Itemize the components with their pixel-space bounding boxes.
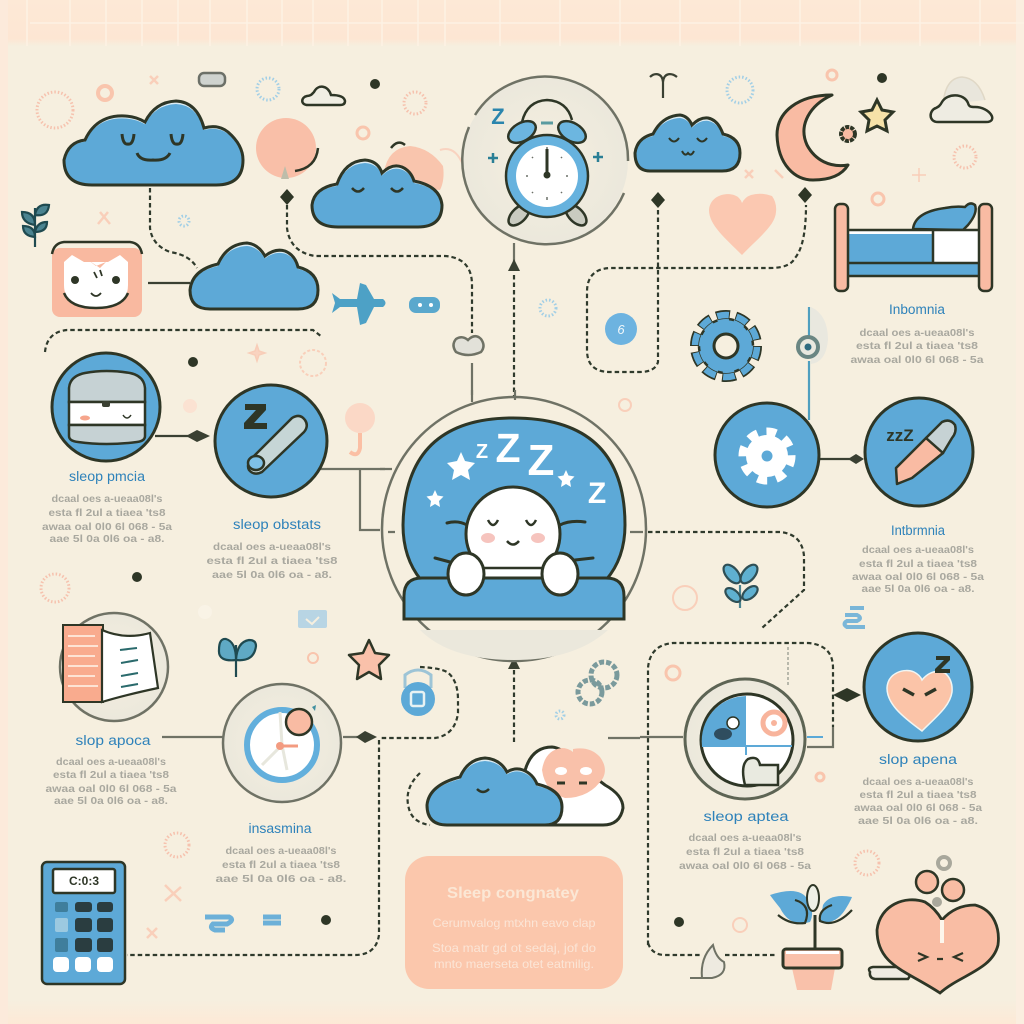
icon: aries glyph: [650, 74, 677, 98]
text: sleep apnea left: awaa oal 0l0 6l 068 - 5a: [42, 522, 173, 533]
icon: sleep mask circle: [52, 353, 160, 461]
text: sleep apnea right: awaa oal 0l0 6l 068 - 5a: [854, 803, 983, 814]
text: insomnia right: aae 5l 0a 0l6 oa - a8.: [862, 584, 975, 595]
text: sleep apnea centre right: awaa oal 0l0 6l 068 - 5a: [679, 861, 812, 872]
text: insomnia lower: [216, 821, 347, 885]
text: insomnia right: dcaal oes a-ueaa08l's: [862, 545, 974, 556]
icon: sleeping heart: [869, 857, 998, 993]
icon: outline cloud with halo: [931, 77, 992, 122]
text: top right insomnia: Inbomnia: [889, 302, 945, 317]
icon: blue scribble lower: [205, 917, 281, 930]
text: insomnia lower: aae 5l 0a 0l6 oa - a8.: [216, 874, 347, 885]
icon: sleeping cloud top left: [64, 101, 243, 185]
icon: calculator: [42, 862, 125, 984]
text: sleep apnea left: aae 5l 0a 0l6 oa - a8.: [50, 534, 165, 545]
text: sleep obstacles: esta fl 2ul a tiaea 'ts8: [206, 556, 338, 567]
hero: sleeping character dome: Z: [528, 436, 554, 485]
icon: small pill: [199, 73, 225, 86]
text: top right insomnia: [850, 302, 984, 366]
icon: circle gear: [715, 403, 819, 507]
icon: blue padlock: [401, 670, 435, 716]
icon: blue number dot: 6: [617, 322, 625, 337]
text: insomnia lower: dcaal oes a-ueaa08l's: [226, 846, 337, 857]
decor: peach shape behind cloud: [384, 143, 444, 190]
text: sleep apnea right: aae 5l 0a 0l6 oa - a8.: [858, 816, 978, 827]
text: sleep apnea lower left: esta fl 2ul a tiaea 'ts8: [53, 770, 170, 781]
text: insomnia right: esta fl 2ul a tiaea 'ts8: [859, 559, 978, 570]
text: sleep apnea lower left: aae 5l 0a 0l6 oa - a8.: [54, 796, 168, 807]
text: top right insomnia: esta fl 2ul a tiaea 'ts8: [856, 341, 979, 352]
icon: pill badge: [409, 297, 440, 313]
hero: sleeping character dome: Z: [588, 477, 606, 510]
icon: z and pill circle: [215, 385, 327, 497]
icon: heart circle: [864, 633, 972, 741]
icon: cat face tile: [52, 242, 142, 317]
icon: peach star: [349, 640, 389, 679]
text: insomnia right: [852, 523, 985, 595]
text: sleep apnea left: sleop pmcia: [69, 469, 146, 484]
hero: sleeping character dome: Z: [495, 425, 521, 471]
text: sleep apnea centre right: [679, 809, 812, 872]
icon: blue gear: [695, 315, 757, 377]
icon: blue number dot: [605, 313, 637, 345]
icon: sleeping cloud two: [312, 160, 442, 227]
icon: teal sprig: [219, 639, 256, 677]
decor: peach circle with arc: [256, 118, 318, 179]
icon: crescent moon: [777, 95, 848, 180]
icon: small outline cloud: [302, 87, 345, 105]
text: sleep obstacles: aae 5l 0a 0l6 oa - a8.: [212, 570, 332, 581]
text: sleep apnea right: slop apena: [879, 752, 958, 767]
icon: airplane: [332, 283, 386, 325]
text: sleep apnea centre right: dcaal oes a-ueaa08l's: [688, 833, 802, 844]
icon: blue scribble: [844, 608, 865, 627]
text: sleep obstacles: sleop obstats: [233, 517, 321, 532]
panel: callout box: Stoa matr gd ot sedaj, jof do: [432, 941, 596, 955]
text: sleep apnea left: dcaal oes a-ueaa08l's: [52, 494, 163, 505]
icon: bed: [835, 203, 992, 291]
icon: pale heart: [709, 194, 776, 255]
text: sleep apnea lower left: dcaal oes a-ueaa08l's: [56, 757, 166, 768]
text: insomnia right: Intbrmnia: [891, 523, 945, 538]
decorative background motifs: [37, 70, 976, 938]
small dark clover marks: [132, 73, 887, 927]
text: insomnia right: awaa oal 0l0 6l 068 - 5a: [852, 572, 985, 583]
panel: callout box: Cerumvalog mtxhn eavo clap: [432, 916, 596, 930]
connector lines: [45, 187, 864, 955]
text: top right insomnia: dcaal oes a-ueaa08l's: [860, 328, 975, 339]
hero: sleeping character dome: Z: [476, 441, 488, 463]
text: insomnia lower: insasmina: [248, 821, 312, 836]
icon: peach hook: [345, 403, 375, 454]
icon: quadrant dial: [685, 679, 805, 799]
panel: callout box: [405, 856, 623, 989]
icon: alarm clock in ring: Z: [491, 104, 505, 129]
text: sleep apnea right: dcaal oes a-ueaa08l's: [862, 777, 974, 788]
text: sleep apnea lower left: [46, 733, 177, 807]
icon: open book in ring: [60, 613, 168, 721]
panel: callout box: mnto maerseta otet eatmilig.: [434, 957, 594, 971]
icon: calculator: C:0:3: [69, 874, 99, 888]
text: sleep apnea right: esta fl 2ul a tiaea 'ts8: [860, 790, 977, 801]
icon: droplet: [690, 945, 724, 978]
text: sleep obstacles: dcaal oes a-ueaa08l's: [213, 542, 332, 553]
icon: circle pen and zzz: zzZ: [886, 426, 914, 445]
text: sleep apnea lower left: slop apoca: [76, 733, 151, 748]
icon: blue and peach clouds: [427, 747, 623, 825]
icon: leaf sprig left: [22, 205, 49, 247]
text: sleep apnea centre right: esta fl 2ul a tiaea 'ts8: [686, 847, 805, 858]
panel: callout box: Sleep congnatey: [447, 885, 579, 902]
icon: small envelope: [298, 610, 327, 628]
icon: potted plant: [770, 885, 852, 990]
text: sleep apnea left: [42, 469, 173, 545]
icon: twin gears: [578, 662, 617, 704]
text: sleep apnea right: [854, 752, 983, 827]
text: sleep apnea lower left: awaa oal 0l0 6l 068 - 5a: [46, 784, 177, 795]
text: sleep apnea centre right: sleop aptea: [704, 809, 789, 824]
text: sleep apnea left: esta fl 2ul a tiaea 'ts8: [48, 508, 166, 519]
text: sleep obstacles: [206, 517, 338, 581]
icon: star and small flower: [841, 100, 893, 141]
icon: circle pen and zzz: [865, 398, 973, 506]
icon: grey capsule: [454, 336, 484, 355]
text: insomnia lower: esta fl 2ul a tiaea 'ts8: [222, 860, 341, 871]
icon: cloud three: [190, 243, 318, 309]
icon: alarm clock in ring: [462, 77, 628, 244]
hero: sleeping character dome: [380, 390, 646, 661]
icon: clock in ring: [223, 684, 341, 802]
text: top right insomnia: awaa oal 0l0 6l 068 - 5a: [850, 355, 984, 366]
icon: sleeping cloud right: [635, 115, 740, 171]
icon: leaf sprig right: [720, 562, 761, 608]
icon: hanging ring: [798, 307, 828, 364]
